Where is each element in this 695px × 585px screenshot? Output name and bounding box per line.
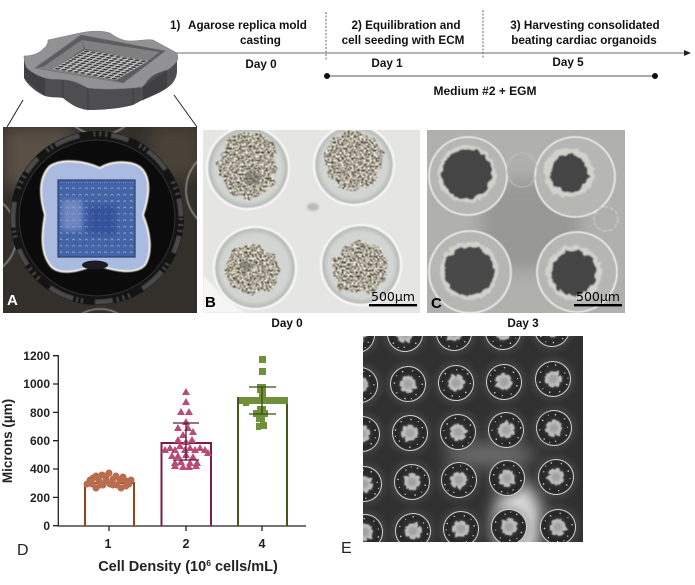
step 1 heading: Agarose replica mold — [188, 19, 307, 32]
x tick labels — [105, 537, 266, 551]
bar: density 1 — [84, 470, 134, 526]
label A: A — [7, 292, 18, 309]
step 2 heading: 2) Equilibration and — [351, 19, 461, 32]
y tick labels: 400 — [30, 462, 50, 476]
timeline arrow — [175, 50, 691, 56]
y tick labels: 1000 — [23, 377, 50, 391]
step 1 heading: 1) — [170, 19, 181, 32]
glass arcs — [3, 127, 197, 313]
panel A: photo of mold in well — [3, 127, 197, 313]
caption day 3: Day 3 — [507, 317, 539, 330]
y tick labels: 800 — [30, 406, 50, 420]
bar: density 4 — [238, 356, 288, 526]
black ring — [15, 136, 179, 300]
label D: D — [17, 542, 29, 559]
y tick labels: 1200 — [23, 349, 50, 363]
label E: E — [341, 540, 352, 557]
day 1 label: Day 1 — [371, 57, 403, 70]
scale bar: 500µm — [576, 289, 620, 304]
caption day 0: Day 0 — [271, 317, 303, 330]
label B: B — [205, 294, 216, 311]
step 1 heading — [170, 19, 307, 47]
step 3 heading: beating cardiac organoids — [511, 34, 657, 47]
label C: C — [431, 295, 442, 312]
panel C: day 3 wells — [427, 130, 625, 313]
panel B: day 0 wells — [203, 125, 420, 313]
step 3 heading: 3) Harvesting consolidated — [510, 19, 660, 32]
y tick labels: 200 — [30, 491, 50, 505]
step 1 heading: casting — [240, 34, 281, 47]
x tick labels: 2 — [183, 537, 190, 551]
connector lines from mold to photo — [7, 95, 197, 127]
x axis title: cells/mL) — [211, 559, 278, 575]
scale bar — [369, 292, 417, 306]
y tick labels — [23, 349, 50, 533]
y tick labels: 0 — [43, 519, 50, 533]
medium label: Medium #2 + EGM — [433, 84, 537, 98]
x tick labels: 1 — [105, 537, 112, 551]
dashed step divider 1 — [325, 12, 327, 60]
day 0 label: Day 0 — [245, 58, 277, 71]
agarose mold — [41, 161, 150, 272]
x axis title: 6 — [206, 558, 211, 568]
panel E: microwell array micrograph — [363, 336, 583, 542]
day 5 label: Day 5 — [552, 56, 584, 69]
x axis title: Cell Density (10 — [98, 559, 206, 575]
dashed step divider 2 — [482, 10, 484, 58]
chart D: bar chart of microns by cell density — [0, 349, 306, 575]
x tick labels: 4 — [259, 537, 266, 551]
medium span line — [324, 73, 658, 79]
scale bar: 500µm — [371, 289, 415, 304]
axes — [53, 355, 306, 531]
y axis title: Microns (µm) — [0, 399, 15, 483]
bar: density 2 — [161, 388, 212, 526]
icon: 3D printed mold — [24, 31, 178, 110]
y tick labels: 600 — [30, 434, 50, 448]
step 2 heading: cell seeding with ECM — [342, 34, 464, 47]
scale bar — [574, 292, 622, 306]
